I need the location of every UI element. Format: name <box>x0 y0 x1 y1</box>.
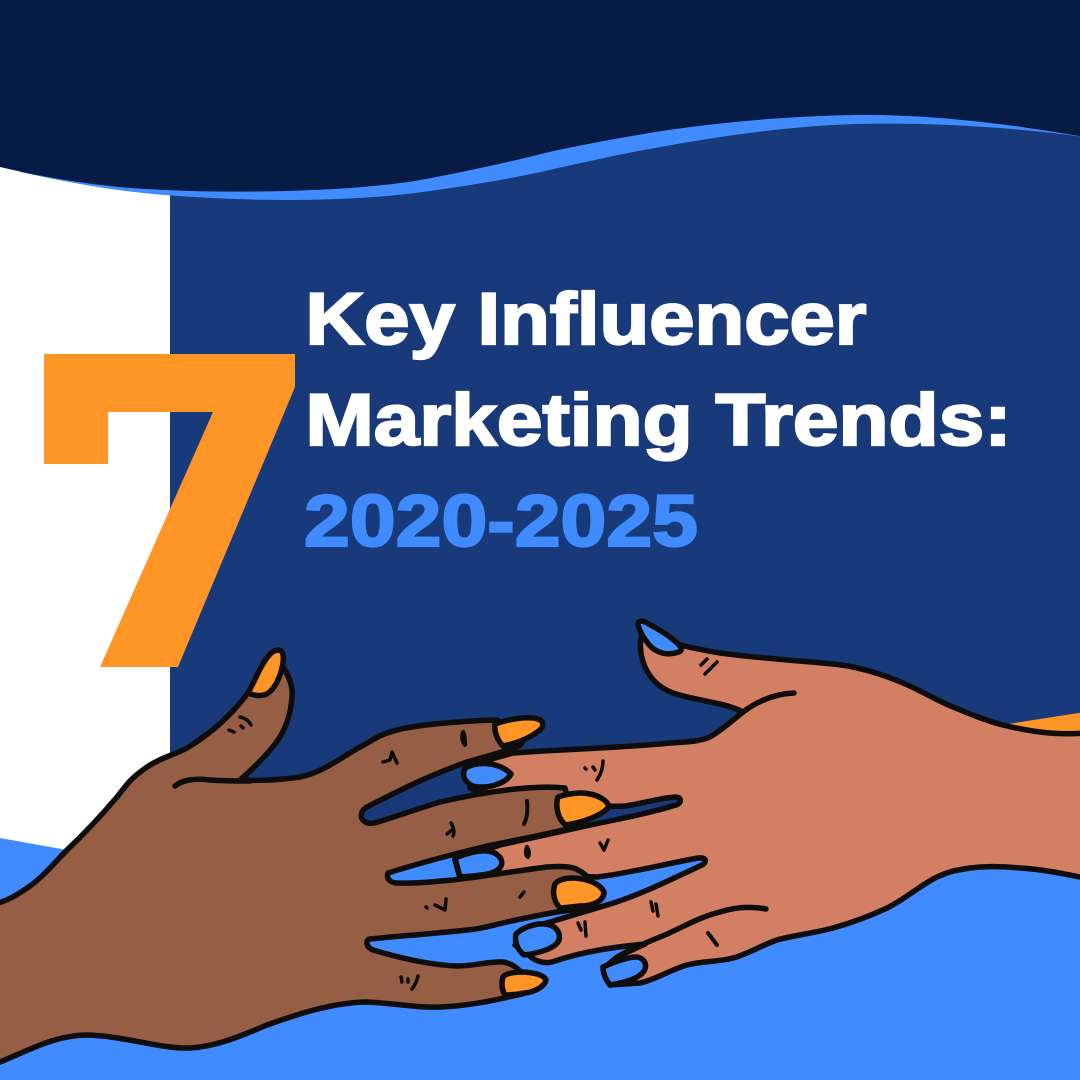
right hand silhouette <box>455 625 1080 985</box>
left index nail <box>495 718 543 746</box>
big orange number seven <box>44 354 295 667</box>
panel: navy background <box>170 100 1080 950</box>
right nail 2 <box>455 851 502 877</box>
left little nail <box>502 972 546 995</box>
title line 1: Key Influencer <box>306 279 866 360</box>
right nail 3 <box>515 924 559 955</box>
right little finger crease <box>617 907 766 957</box>
right thumb nail <box>638 621 681 654</box>
right thumb crease <box>743 693 794 712</box>
right nail 4 <box>603 957 646 985</box>
panel: orange strip behind wrist <box>1005 712 1080 760</box>
left thumb crease <box>175 779 250 786</box>
right hand wrinkle marks <box>578 659 717 945</box>
illustration: left hand <box>0 650 609 1064</box>
title line 3: years: 2020-2025 <box>304 481 698 562</box>
panel: dark navy top wave <box>0 0 1080 192</box>
panel: bright blue lower band <box>0 838 1080 1080</box>
left thumb nail <box>248 650 283 695</box>
title <box>304 279 1012 562</box>
panel: bright blue wave edge <box>20 100 1080 200</box>
illustration: right hand <box>455 621 1080 985</box>
left middle nail <box>557 793 609 825</box>
left ring nail <box>554 878 604 908</box>
left hand wrinkle marks <box>229 717 529 989</box>
title line 2: Marketing Trends: <box>306 380 1012 461</box>
right nail 1 <box>464 763 511 787</box>
left hand silhouette <box>0 667 596 1064</box>
